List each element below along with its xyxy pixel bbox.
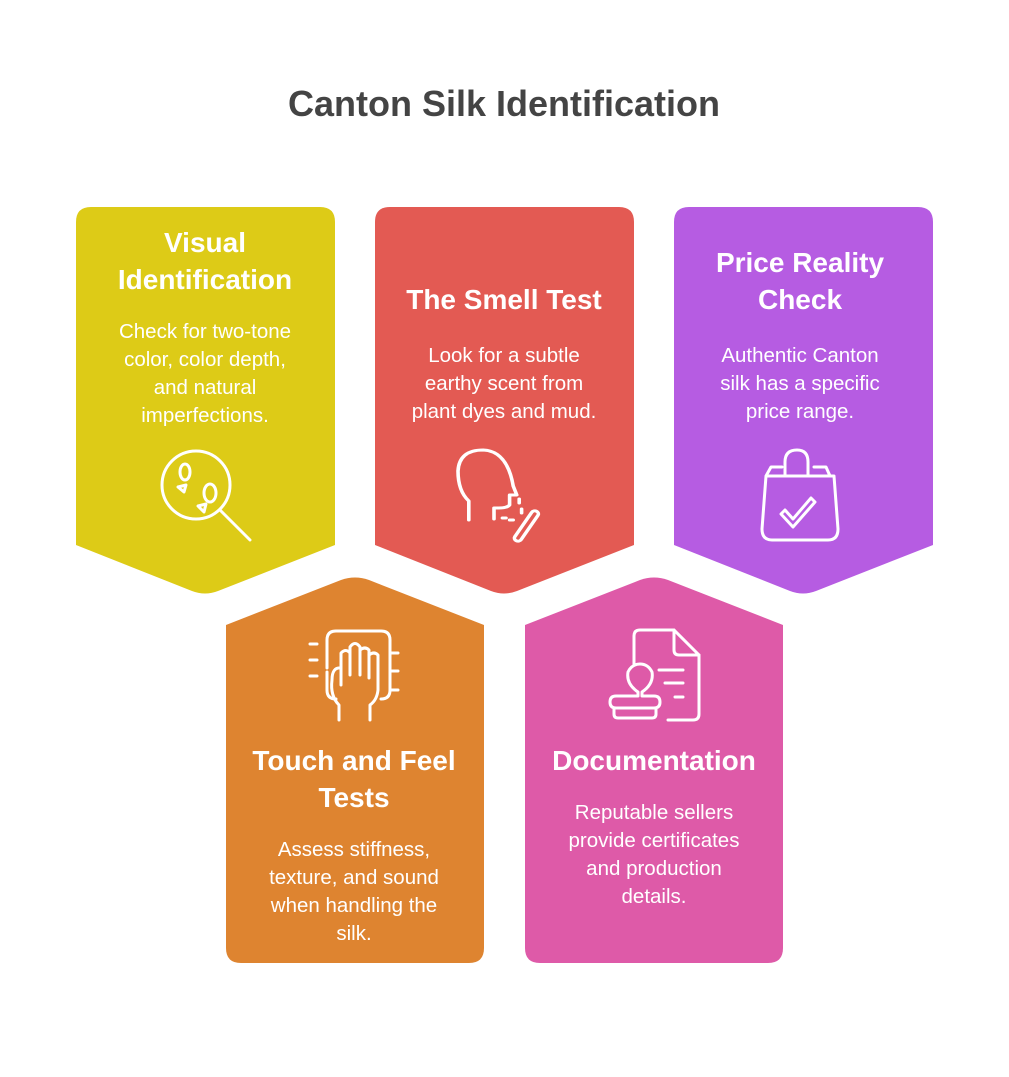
panel: smell test: earthy scent from	[425, 372, 583, 395]
panel: documentation: and production	[586, 857, 722, 880]
icon: document with stamp	[610, 630, 699, 720]
panel: visual identification: Check for two-tone	[119, 320, 291, 343]
panel: documentation: Reputable sellers	[575, 801, 733, 824]
panel: visual identification: Visual	[164, 227, 246, 258]
panel: smell test: The Smell Test	[406, 284, 602, 315]
panel: price reality check: Price Reality	[716, 247, 884, 278]
panel: touch and feel: Assess stiffness,	[278, 838, 430, 861]
panel: smell test: Look for a subtle	[428, 344, 580, 367]
panel: touch and feel: Touch and Feel	[252, 745, 456, 776]
panel: price reality check: Authentic Canton	[721, 344, 879, 367]
panel: touch and feel: when handling the	[270, 894, 437, 917]
panel: smell test	[375, 207, 634, 594]
panel: smell test: plant dyes and mud.	[412, 400, 596, 423]
panel: visual identification: imperfections.	[141, 404, 269, 427]
panel: visual identification: Identification	[118, 264, 292, 295]
panel: visual identification: and natural	[154, 376, 256, 399]
panel: price reality check: silk has a specific	[720, 372, 880, 395]
icon: shopping bag with check	[762, 450, 838, 540]
title: Canton Silk Identification	[288, 83, 720, 124]
panel: price reality check: Check	[758, 284, 842, 315]
panel: price reality check: price range.	[746, 400, 854, 423]
icon: hand	[310, 631, 398, 720]
panel: visual identification	[76, 207, 335, 594]
panel: visual identification: color, color depth,	[124, 348, 286, 371]
panel: touch and feel	[226, 578, 484, 963]
icon: magnifier	[162, 451, 250, 540]
panel: documentation: Documentation	[552, 745, 756, 776]
panel: touch and feel: Tests	[318, 782, 390, 813]
icon: nose smelling	[458, 450, 540, 542]
panel: documentation	[525, 578, 783, 963]
panel: price reality check	[674, 207, 933, 594]
panel: documentation: provide certificates	[569, 829, 739, 852]
panel: documentation: details.	[622, 885, 686, 908]
panel: touch and feel: texture, and sound	[269, 866, 439, 889]
panel: touch and feel: silk.	[336, 922, 372, 945]
